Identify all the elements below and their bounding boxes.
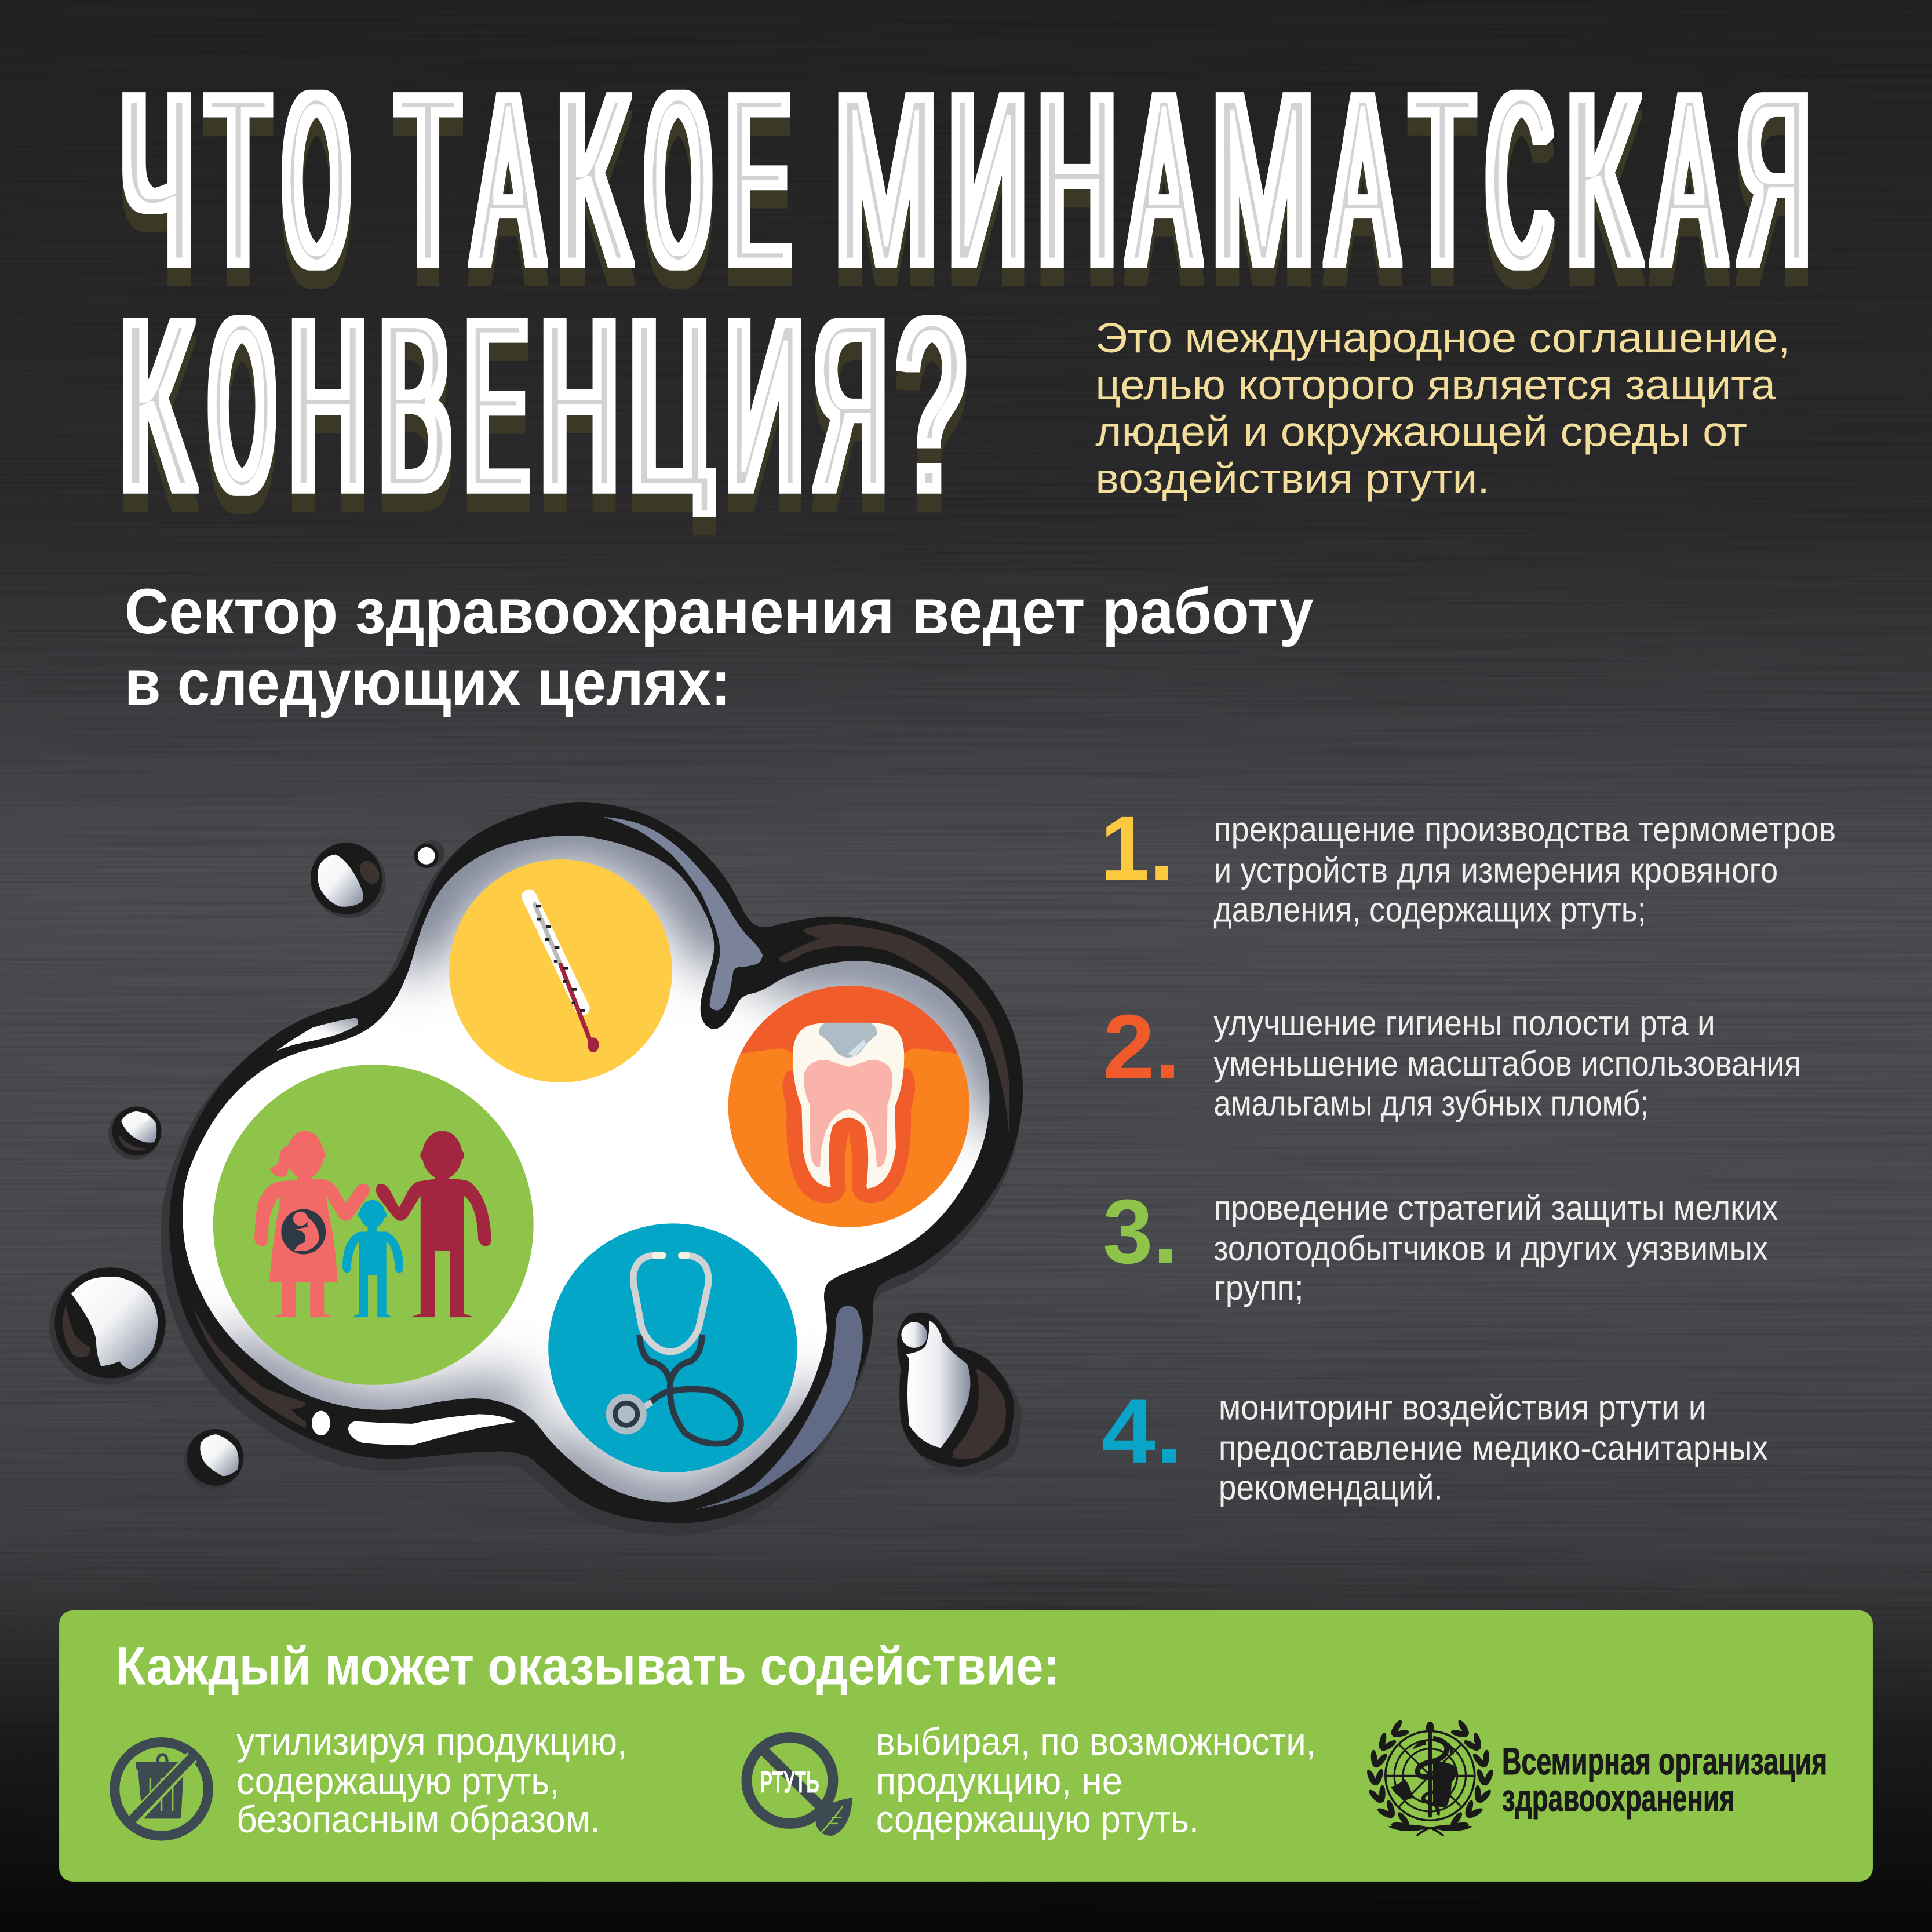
title: К xyxy=(1566,60,1639,336)
title: О xyxy=(285,42,348,318)
title: В xyxy=(380,268,450,543)
title: Е xyxy=(728,60,789,336)
goal 1: 1. xyxy=(1100,798,1174,899)
title: О xyxy=(647,42,710,318)
title: О xyxy=(647,60,710,336)
goal 2 xyxy=(1103,996,1802,1122)
title: О xyxy=(285,60,348,336)
goal 4: мониторинг воздействия ртути и xyxy=(1219,1387,1707,1427)
goal 1: и устройств для измерения кровяного xyxy=(1213,850,1778,890)
title: И xyxy=(949,42,1026,318)
title: Н xyxy=(290,268,366,543)
goal 1: давления, содержащих ртуть; xyxy=(1213,890,1646,929)
title: Н xyxy=(1038,42,1116,318)
title: Т xyxy=(1412,42,1473,318)
intro text: воздействия ртути. xyxy=(1095,456,1490,502)
title: К xyxy=(1566,42,1639,318)
title: ? xyxy=(898,268,964,543)
goal 3 xyxy=(1103,1181,1778,1307)
title: Я xyxy=(814,268,886,543)
blob outline xyxy=(169,802,1023,1523)
droplet: middle left xyxy=(108,1106,162,1160)
blob interior shading xyxy=(240,823,1004,1513)
goal 2: улучшение гигиены полости рта и xyxy=(1213,1003,1715,1042)
highlight bottom streak xyxy=(348,1414,515,1445)
text: dispose safely: безопасным образом. xyxy=(236,1798,600,1840)
title: Ц xyxy=(630,268,711,543)
title: Ц xyxy=(630,268,711,543)
panel: everyone can help xyxy=(59,1610,1873,1882)
title: А xyxy=(1656,42,1723,318)
title: И xyxy=(726,268,803,543)
title: Н xyxy=(1038,42,1116,318)
goal 2: амальгамы для зубных пломб; xyxy=(1213,1083,1649,1122)
globe xyxy=(1386,1731,1475,1820)
title: А xyxy=(475,42,542,318)
wreath xyxy=(1365,1719,1495,1836)
title: Т xyxy=(398,60,458,336)
title: А xyxy=(475,42,542,318)
child xyxy=(342,1200,403,1317)
droplet: right xyxy=(897,1313,1022,1475)
title: Ч xyxy=(121,42,193,318)
title: С xyxy=(1488,60,1551,336)
circle: stethoscope xyxy=(548,1223,797,1472)
title: Е xyxy=(466,268,527,543)
text: choose mercury free: продукцию, не xyxy=(876,1759,1122,1802)
title: О xyxy=(285,42,348,318)
WHO name xyxy=(1502,1740,1827,1820)
highlight upper left xyxy=(276,1018,358,1051)
title: Е xyxy=(728,42,789,318)
text: dispose safely xyxy=(236,1720,627,1840)
title: Н xyxy=(290,268,366,543)
goal 1: прекращение производства термометров xyxy=(1213,810,1836,849)
blob bottom-right reflection xyxy=(695,1306,863,1510)
title: К xyxy=(1566,42,1639,318)
title: И xyxy=(726,286,803,562)
title: К xyxy=(556,42,629,318)
title: А xyxy=(1329,42,1397,318)
section heading: в следующих целях: xyxy=(125,647,731,719)
text: dispose safely: содержащую ртуть, xyxy=(236,1759,559,1802)
title: Я xyxy=(814,268,886,543)
intro text xyxy=(1095,315,1790,502)
title: М xyxy=(1212,60,1314,336)
title: И xyxy=(949,60,1026,336)
text: Я xyxy=(1737,42,1809,318)
title: Ч xyxy=(121,42,193,318)
title: А xyxy=(1329,60,1397,336)
title: А xyxy=(1656,42,1723,318)
title: Я xyxy=(814,286,886,562)
title: Т xyxy=(398,42,458,318)
title: И xyxy=(726,268,803,543)
text: Я xyxy=(1737,42,1809,318)
icon: WHO emblem xyxy=(1365,1719,1495,1836)
circle: tooth xyxy=(728,986,970,1227)
icon: stethoscope xyxy=(606,1256,741,1443)
blob top-right reflection xyxy=(603,817,763,1011)
title: Н xyxy=(541,286,618,562)
intro text: целью которого является защита xyxy=(1095,362,1776,409)
intro text: людей и окружающей среды от xyxy=(1095,409,1747,455)
title: О xyxy=(210,268,274,543)
circle: thermometer xyxy=(449,859,672,1082)
title: Т xyxy=(207,60,269,336)
title: К xyxy=(119,268,193,543)
panel heading: Каждый может оказывать содействие: xyxy=(116,1637,1060,1696)
text: choose mercury free xyxy=(876,1720,1316,1840)
title xyxy=(122,89,1808,535)
highlight bottom dot xyxy=(312,1411,330,1435)
title: В xyxy=(380,268,450,543)
text: choose mercury free: выбирая, по возможности, xyxy=(876,1720,1316,1763)
title: М xyxy=(835,42,937,318)
continents xyxy=(1391,1740,1457,1807)
circle: family xyxy=(213,1065,534,1385)
title: ? xyxy=(898,268,964,543)
icon: thermometer xyxy=(529,895,599,1052)
title: А xyxy=(1130,42,1198,318)
title: Н xyxy=(541,268,618,543)
title: К xyxy=(556,60,629,336)
mercury blob xyxy=(165,802,1023,1532)
title: М xyxy=(835,60,937,336)
title: М xyxy=(835,42,937,318)
title: А xyxy=(475,60,542,336)
title: Т xyxy=(1412,60,1473,336)
title: М xyxy=(1212,42,1314,318)
title: Т xyxy=(398,42,458,318)
goal 3: проведение стратегий защиты мелких xyxy=(1213,1188,1778,1227)
title: А xyxy=(1329,42,1397,318)
icon: no mercury: РТУТЬ xyxy=(760,1766,819,1800)
goal 3: групп; xyxy=(1213,1268,1304,1307)
goal 3: 3. xyxy=(1103,1181,1178,1282)
title: Ц xyxy=(630,286,711,562)
title: М xyxy=(1212,42,1314,318)
goal 1 xyxy=(1100,798,1836,929)
blob shadow xyxy=(165,811,1018,1532)
title: Е xyxy=(466,286,527,562)
section heading: Сектор здравоохранения ведет работу xyxy=(125,576,1314,647)
section heading xyxy=(125,576,1314,719)
goal 3: золотодобытчиков и других уязвимых xyxy=(1213,1229,1768,1268)
mother xyxy=(254,1131,370,1317)
title: ? xyxy=(898,286,964,562)
droplet: large left xyxy=(49,1267,166,1385)
goal 4 xyxy=(1102,1381,1768,1507)
title: Н xyxy=(1038,60,1116,336)
title: К xyxy=(556,42,629,318)
title: О xyxy=(647,42,710,318)
intro text: Это международное соглашение, xyxy=(1095,315,1790,362)
staff and snake xyxy=(1417,1722,1447,1817)
title: С xyxy=(1488,42,1551,318)
title: Ч xyxy=(121,60,193,336)
father xyxy=(376,1131,491,1317)
droplet: tiny xyxy=(414,840,445,868)
droplet: bottom xyxy=(184,1429,243,1490)
title: О xyxy=(210,268,274,543)
text: dispose safely: утилизируя продукцию, xyxy=(236,1720,627,1763)
goal 2: 2. xyxy=(1103,996,1180,1098)
blob white interior xyxy=(183,836,989,1502)
blob brown reflection right xyxy=(779,924,1009,1133)
text: Я xyxy=(1737,60,1809,336)
droplet: top xyxy=(311,843,386,918)
fetus xyxy=(281,1209,326,1255)
title: А xyxy=(1130,42,1198,318)
title: Е xyxy=(728,42,789,318)
title: Н xyxy=(290,286,366,562)
title: Е xyxy=(466,268,527,543)
goal 4: рекомендаций. xyxy=(1219,1468,1443,1507)
title: В xyxy=(380,286,450,562)
title: Т xyxy=(207,42,269,318)
title: И xyxy=(949,42,1026,318)
text: choose mercury free: содержащую ртуть. xyxy=(876,1798,1199,1840)
icon: no trash xyxy=(115,1743,208,1836)
title: Н xyxy=(541,268,618,543)
goal 4: 4. xyxy=(1102,1381,1183,1482)
goal 4: предоставление медико-санитарных xyxy=(1219,1428,1768,1468)
title: Т xyxy=(207,42,269,318)
icon: no mercury xyxy=(747,1737,852,1836)
title: С xyxy=(1488,42,1551,318)
WHO name: здравоохранения xyxy=(1502,1777,1735,1820)
title: К xyxy=(119,268,193,543)
goal 2: уменьшение масштабов использования xyxy=(1213,1044,1802,1083)
title: Т xyxy=(1412,42,1473,318)
title: А xyxy=(1656,60,1723,336)
title: А xyxy=(1130,60,1198,336)
icon: family xyxy=(254,1131,491,1317)
title: О xyxy=(210,286,274,562)
icon: tooth xyxy=(782,1023,915,1206)
blob bottom-left reflection xyxy=(193,1306,306,1428)
title: К xyxy=(119,286,193,562)
